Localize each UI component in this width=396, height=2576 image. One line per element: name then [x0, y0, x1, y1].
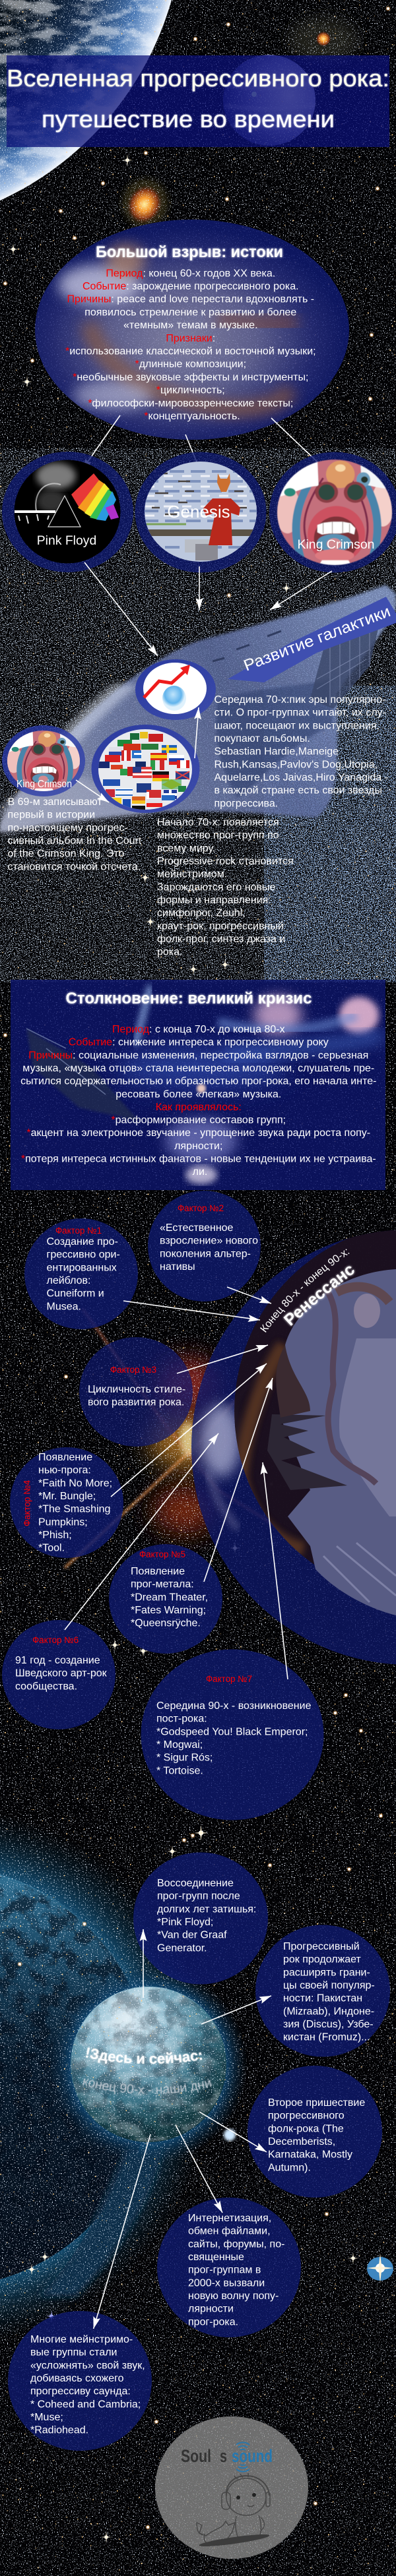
text: early 70s: всему миру. — [157, 843, 215, 854]
present bubble: folk prog: Второе пришествие — [268, 2097, 365, 2109]
text: early 70s: Зарождаются его новые — [157, 882, 275, 893]
logo: Soul's sound: sound — [232, 2446, 273, 2466]
factor 6: 91 год - создание — [15, 1655, 100, 1666]
factor 2: Фактор №2 — [178, 1203, 224, 1213]
factor 7 — [141, 1650, 323, 1820]
text: 1969 first album: становится точкой отсчета. — [8, 861, 141, 872]
factor 7: Середина 90-х - возникновение — [156, 1700, 312, 1712]
icon: sound waves — [236, 2442, 249, 2472]
text: 1969 first album: по-настоящему прогрес- — [8, 822, 128, 833]
factor 4 — [10, 1447, 123, 1558]
icon: child with headphones and fox — [197, 2473, 270, 2545]
body text: *концептуальность. — [144, 411, 240, 422]
factor 3 — [79, 1337, 193, 1447]
factor 5: *Fates Warning; — [131, 1605, 206, 1616]
ground shadow — [199, 2532, 270, 2548]
factor 1: грессивно ори- — [46, 1249, 120, 1261]
present bubble: reunions — [133, 1853, 268, 1985]
factor 4: *Mr. Bungle; — [38, 1491, 96, 1502]
starburst behind the factors — [65, 1309, 304, 1568]
present bubble: internet: прог-группам в — [188, 2265, 261, 2276]
factor 3: Фактор №3 — [110, 1365, 156, 1375]
factor 7: Фактор №7 — [206, 1674, 252, 1684]
text: 1969 first album: of the Crimson King. Это — [8, 849, 125, 860]
text: early 70s: краут-рок, прогрессивный — [157, 920, 284, 932]
factor 4: Фактор №4 — [22, 1480, 32, 1526]
body text: *философски-мировоззренческие тексты; — [88, 398, 293, 409]
panel: collision great crisis — [11, 980, 385, 1190]
factor 5: *Dream Theater, — [131, 1592, 208, 1603]
present bubble: new countries: рок продолжает — [283, 1954, 362, 1965]
dark planet crescent — [234, 1230, 396, 1565]
panel: big bang origins — [35, 220, 349, 440]
factor 4: Появление — [38, 1452, 92, 1463]
factor 4: *Phish; — [38, 1530, 72, 1541]
band label: King Crimson — [297, 537, 375, 552]
factor 4: *Tool. — [38, 1543, 65, 1554]
factor 3: вого развития рока. — [88, 1397, 184, 1408]
factor 2: поколения альтер- — [160, 1248, 251, 1259]
present bubble: mainstream: *Muse; — [30, 2412, 63, 2423]
arrows: factors to renaissance — [65, 1287, 288, 1679]
present bubble: mainstream: Многие мейнстримо- — [30, 2334, 133, 2345]
galaxy: orange burst — [119, 178, 170, 231]
present bubble: new countries: зия (Discus), Узбе- — [283, 2019, 374, 2030]
body text: *необычные звуковые эффекты и инструменты; — [73, 372, 308, 383]
factor 6 — [2, 1620, 116, 1729]
present bubble: reunions: Воссоединение — [157, 1878, 234, 1889]
body text: Причины: социальные изменения, перестройка взглядов - серьезная — [28, 1050, 368, 1061]
text: mid-70s peak: Rush,Kansas,Pavlov's Dog,Utopia, — [214, 759, 378, 770]
planet: jupiter behind the title — [223, 55, 315, 146]
factor 7: * Sigur Rós; — [156, 1752, 213, 1764]
factor 1: Cuneiform и — [46, 1288, 104, 1300]
factor 4: *The Smashing — [38, 1504, 110, 1515]
present bubble: mainstream: * Coheed and Cambria; — [30, 2399, 141, 2410]
text: early 70s: Начало 70-х: появляется — [157, 817, 279, 828]
present day planet title — [82, 2047, 212, 2095]
band: King Crimson — [269, 452, 396, 572]
present bubble: internet: сайты, форумы, по- — [188, 2238, 284, 2250]
body text: музыка, «музыка отцов» стала неинтересна молодежи, слушатель пре- — [22, 1063, 374, 1074]
body text: появилось стремление к развитию и более — [84, 307, 296, 318]
title text: Вселенная прогрессивного рока: — [7, 65, 389, 92]
text: 1969 first album: сивный альбом In the Court — [8, 835, 142, 847]
logo wordmark: s — [220, 2446, 227, 2466]
factor 1: ентированных — [46, 1262, 117, 1273]
body text: Событие: зарождение прогрессивного рока. — [82, 281, 299, 292]
body text: *расформирование составов групп; — [111, 1115, 286, 1126]
present bubble: internet: 2000-х вызвали — [188, 2277, 265, 2289]
present bubble: mainstream: *Radiohead. — [30, 2425, 88, 2436]
crisis image — [26, 986, 383, 1184]
globe — [162, 686, 186, 711]
heading: Столкновение: великий кризис — [66, 990, 312, 1007]
factor 5: прог-метала: — [131, 1579, 194, 1590]
present bubble: mainstream: добиваясь схожего — [30, 2373, 124, 2384]
text: early 70s: Progressive rock становится — [157, 856, 294, 867]
factor 1: лейблов: — [46, 1275, 90, 1286]
factor 5 — [109, 1544, 222, 1654]
factor 1: Создание про- — [46, 1236, 118, 1247]
planet: small glowing present day — [50, 1965, 248, 2163]
body text: *цикличность; — [156, 385, 225, 396]
planet: renaissance with Venus: Конец 80-х - конец 90-х: — [260, 1249, 350, 1333]
factor 7: * Tortoise. — [156, 1765, 203, 1776]
body text: Период: конец 60-х годов XX века. — [106, 268, 275, 279]
body text: ли. — [193, 1166, 207, 1178]
present bubble: folk prog: фолк-рока (The — [268, 2123, 344, 2134]
present bubble: internet: лярности — [188, 2304, 234, 2315]
present bubble: folk prog: Decemberists, — [268, 2136, 335, 2147]
body text: *использование классической и восточной музыки; — [65, 345, 316, 357]
body text: *акцент на электронное звучание - упрощение звука ради роста попу- — [26, 1127, 370, 1139]
small label: King Crimson — [16, 779, 72, 790]
present bubble: internet: Интернетизация, — [188, 2213, 271, 2224]
band: Pink Floyd — [2, 452, 133, 572]
text: mid-70s peak: сти. О прог-группах читают, их слу- — [214, 707, 386, 719]
shell spikes — [267, 1414, 347, 1490]
factor 2: «Естественное — [160, 1222, 234, 1234]
body text: Как проявлялось: — [156, 1102, 242, 1113]
text: 1969 first album: В 69-м записывают — [8, 796, 102, 808]
planet: renaissance with Venus: Ренессанс — [282, 1265, 356, 1327]
logo wordmark: Soul — [181, 2446, 211, 2466]
factor 1: Фактор №1 — [55, 1226, 102, 1236]
text: early 70s: формы и направления: — [157, 895, 271, 906]
text: mid-70s peak: Середина 70-х:пик эры популярно- — [214, 694, 385, 705]
factor 5: Фактор №5 — [139, 1549, 185, 1559]
factor 1: Musea. — [46, 1301, 81, 1312]
text: early 70s: симфопрог, Zeuhl, — [157, 908, 246, 919]
text: early 70s: фолк-прог, синтез джаза и — [157, 934, 285, 945]
factor 2 — [148, 1191, 261, 1302]
body text: сытился содержательностью и образностью прог-рока, его начала инте- — [20, 1076, 376, 1087]
icon: world flags — [91, 725, 199, 813]
present bubble: new countries: расширять грани- — [283, 1967, 370, 1978]
text: 1969 first album: первый в истории — [8, 810, 95, 821]
present bubble: folk prog — [248, 2066, 382, 2198]
text: mid-70s peak: в каждой стране есть свои звезды — [214, 785, 382, 796]
present bubble: new countries: кистан (Fromuz)... — [283, 2032, 370, 2043]
present bubble: reunions: долгих лет затишья: — [157, 1903, 256, 1915]
arrows: present planet to bubbles — [94, 1929, 271, 2329]
galaxy development ship — [0, 585, 396, 835]
factor 7: *Godspeed You! Black Emperor; — [156, 1726, 308, 1737]
text: mid-70s peak: Sebastian Hardie,Maneige — [214, 746, 339, 758]
present bubble: mainstream: прогрессиву саунда: — [30, 2386, 131, 2397]
present day planet title: конец 90-х - наши дни — [82, 2078, 212, 2095]
present bubble: folk prog: прогрессивного — [268, 2111, 345, 2122]
text: mid-70s peak: Aquelarre,Los Jaivas,Hiro Yanagida - — [214, 772, 388, 783]
explosion image — [58, 243, 297, 410]
body text: Период: с конца 70-х до конца 80-х — [112, 1024, 285, 1035]
nebula: top right — [289, 17, 358, 62]
arrows: galaxy development — [76, 707, 199, 802]
title banner — [7, 55, 389, 147]
present bubble: internet: новую волну попу- — [188, 2291, 279, 2302]
text: early 70s: множество прог-групп по — [157, 830, 279, 841]
logo: Soul's sound — [155, 2416, 308, 2559]
present bubble: internet: прог-рока. — [188, 2316, 238, 2327]
factor 3: Цикличность стиле- — [88, 1384, 185, 1395]
factor 2: взросление» нового — [160, 1236, 258, 1247]
body text: «темным» темам в музыке. — [123, 320, 258, 331]
factor 4: *Faith No More; — [38, 1478, 112, 1489]
arrows: bands to galaxy — [84, 562, 332, 656]
present bubble: internet: священные — [188, 2252, 244, 2263]
planet: earth top left — [0, 0, 183, 229]
text: mid-70s peak: покупают альбомы. — [214, 733, 310, 744]
body text: Признаки: — [166, 333, 215, 344]
factor 1 — [24, 1218, 138, 1329]
album art: prism — [15, 463, 119, 527]
banner band — [228, 597, 396, 682]
text: mid-70s peak: шают, посещают их выступления, — [214, 720, 380, 731]
present bubble: reunions: *Pink Floyd; — [157, 1917, 213, 1928]
present bubble: mainstream — [8, 2311, 152, 2451]
band label: Pink Floyd — [37, 533, 96, 548]
band: King Crimson small — [2, 725, 85, 796]
chart line — [144, 671, 185, 698]
text: early 70s: рока. — [157, 947, 182, 958]
venus figure — [339, 1338, 396, 1516]
factor 7: пост-рока: — [156, 1714, 207, 1725]
body text: ресовать более «легкая» музыка. — [116, 1089, 281, 1100]
factor 4: Pumpkins; — [38, 1516, 88, 1528]
title text: путешествие во времени — [42, 105, 335, 133]
present bubble: internet — [157, 2198, 301, 2337]
galaxy heading: Развитие галактики — [241, 603, 393, 675]
period subtitle — [82, 2085, 219, 2094]
factor 6: сообщества. — [15, 1681, 77, 1692]
period on arc — [265, 1241, 370, 1333]
body text: *длинные композиции; — [135, 359, 246, 370]
icon: growth chart with globe — [135, 659, 216, 720]
planet: renaissance with Venus — [191, 1230, 396, 1664]
arrows: origins to bands — [82, 415, 328, 485]
venus painting — [280, 1269, 396, 1615]
renaissance heading — [290, 1267, 362, 1327]
present bubble: mainstream: вые группы стали — [30, 2347, 117, 2358]
present bubble: folk prog: Karnataka, Mostly — [268, 2149, 352, 2161]
present bubble: reunions: прог-групп после — [157, 1891, 240, 1902]
present bubble: new countries: цы своей популяр- — [283, 1980, 375, 1991]
body text: Событие: снижение интереса к прогрессивному року — [69, 1037, 329, 1048]
band label: Genesis — [167, 502, 230, 522]
present bubble: reunions: Generator. — [157, 1942, 207, 1954]
body text: Причины: peace and love перестали вдохновлять - — [67, 294, 314, 305]
present bubble: folk prog: Autumn). — [268, 2162, 311, 2173]
factor 6: Шведского арт-рок — [15, 1668, 108, 1679]
present bubble: internet: обмен файлами, — [188, 2226, 271, 2237]
text: mid-70s peak: прогрессива. — [214, 798, 278, 809]
factor 7: * Mogwai; — [156, 1739, 203, 1751]
heading: Большой взрыв: истоки — [96, 243, 283, 261]
factor 2: нативы — [160, 1261, 195, 1273]
body text: *потеря интереса истинных фанатов - новые тенденции их не устраива- — [21, 1154, 376, 1165]
present bubble: reunions: *Van der Graaf — [157, 1930, 227, 1941]
text: early 70s: мейнстримом. — [157, 869, 227, 880]
present day planet title: !Здесь и сейчас: — [85, 2047, 203, 2065]
present bubble: new countries: Прогрессивный — [283, 1941, 360, 1952]
present bubble: mainstream: «усложнять» свой звук, — [30, 2360, 145, 2371]
present bubble: new countries: (Mizraab), Индоне- — [283, 2006, 374, 2017]
factor 5: *Queensrÿche. — [131, 1618, 201, 1629]
present bubble: new countries — [255, 1925, 390, 2057]
factor 5: Появление — [131, 1566, 185, 1577]
band: Genesis — [135, 452, 267, 572]
factor 6: Фактор №6 — [32, 1635, 79, 1645]
factor 4: нью-прога: — [38, 1465, 91, 1476]
planet: large blue lower left — [0, 1807, 211, 2347]
body text: лярности; — [174, 1141, 222, 1152]
album art: fox in a red dress — [144, 471, 259, 560]
present bubble: new countries: ности: Пакистан — [283, 1993, 362, 2004]
